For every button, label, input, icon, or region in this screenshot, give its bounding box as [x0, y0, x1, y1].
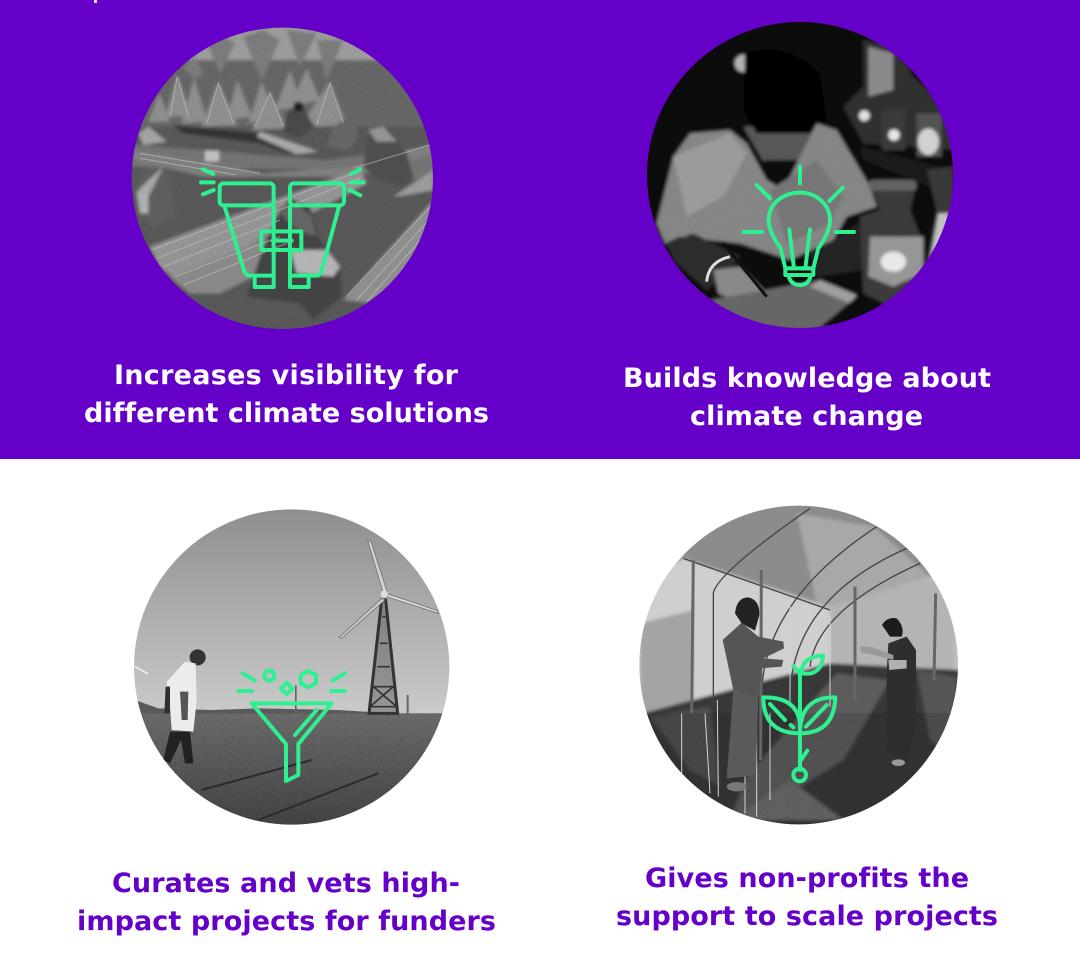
caption: increases visibility [84, 360, 489, 429]
farmer [163, 649, 206, 763]
panel: builds knowledge [623, 10, 991, 432]
caption: supports scaling: support to scale projects [616, 901, 998, 932]
panel: supports scaling [616, 500, 998, 932]
wind turbine [339, 540, 438, 713]
caption: increases visibility: different climate solutions [84, 398, 489, 429]
caption: curates projects: Curates and vets high- [112, 868, 460, 899]
caption: supports scaling: Gives non-profits the [645, 863, 969, 894]
caption: increases visibility: Increases visibility for [114, 360, 459, 391]
photo: farmer and wind turbine [125, 500, 455, 830]
panel: curates projects [77, 500, 496, 937]
caption: curates projects: impact projects for funders [77, 906, 496, 937]
caption: builds knowledge: climate change [690, 401, 923, 432]
caption: curates projects [77, 868, 496, 937]
icon: light bulb [744, 167, 854, 285]
caption: builds knowledge [623, 363, 991, 432]
straw strands [140, 77, 432, 303]
photo: woman writing by lantern light [647, 22, 953, 328]
caption: builds knowledge: Builds knowledge about [623, 363, 991, 394]
icon: funnel [238, 671, 345, 781]
photo: workers among jute bundles [132, 28, 433, 329]
worker in sari [860, 618, 916, 766]
photo: workers in a greenhouse [630, 500, 960, 830]
icon: seedling [763, 655, 835, 781]
icon: binoculars [201, 169, 364, 287]
white bottom panel [0, 459, 1080, 974]
worker in check shirt [723, 597, 784, 791]
panel: increases visibility [84, 10, 489, 429]
caption: supports scaling [616, 863, 998, 932]
purple top panel [0, 0, 1080, 459]
